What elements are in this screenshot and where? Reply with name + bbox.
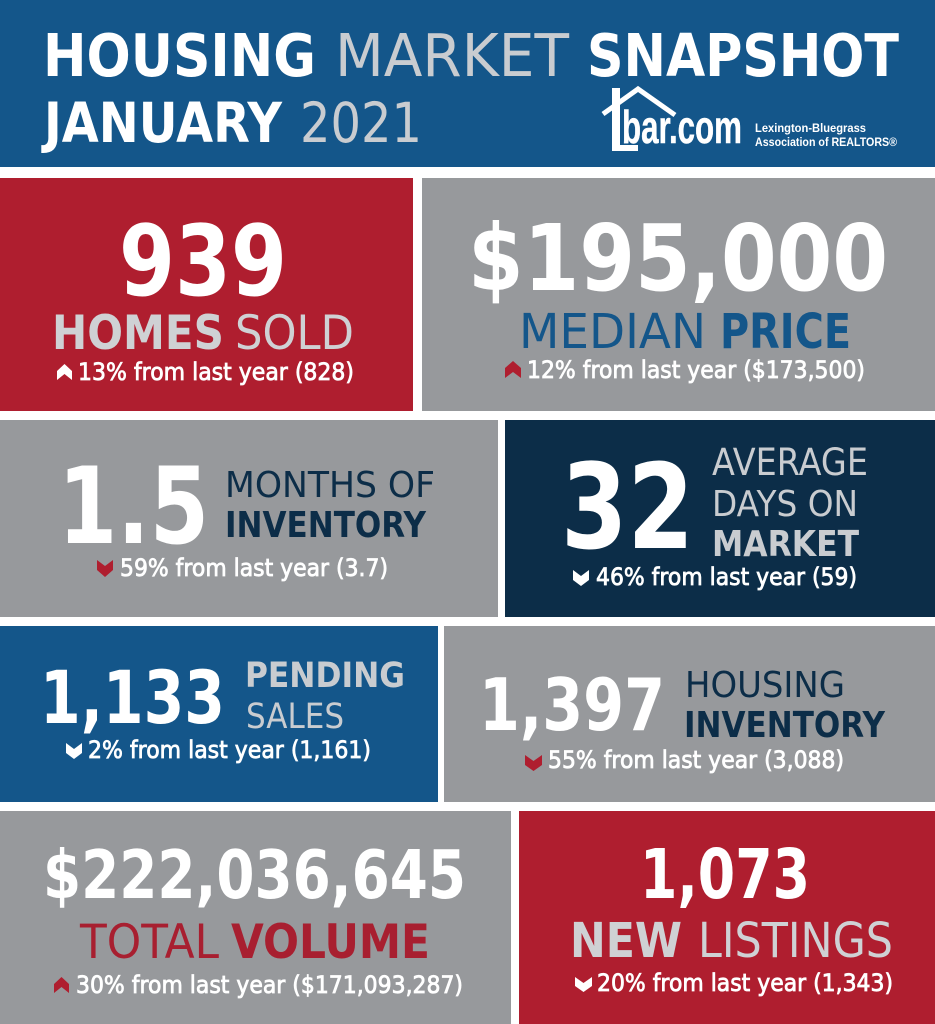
panel: new listings: 1,073 — [640, 835, 810, 915]
subtitle: january 2021: JANUARY — [41, 91, 283, 155]
panel: average days on market: AVERAGE — [712, 441, 868, 484]
title: housing market snapshot: MARKET — [335, 21, 570, 90]
logo: lbar.com house: Lexington-Bluegrass — [755, 121, 866, 135]
panel: new listings: NEW — [570, 913, 682, 969]
logo: lbar.com house — [603, 88, 897, 153]
panel: header — [0, 0, 935, 167]
panel: median price: MEDIAN — [519, 304, 706, 360]
panel: average days on market: 32 — [561, 438, 694, 576]
panel: pending sales: 1,133 — [40, 656, 225, 741]
panel: housing inventory: 1,397 — [479, 663, 665, 747]
panel: total volume: VOLUME — [231, 915, 430, 970]
icon: down arrow — [66, 743, 82, 759]
panel: average days on market: 46% from last year (59) — [596, 563, 857, 591]
icon: up arrow — [54, 977, 69, 993]
panel: homes sold: HOMES — [52, 306, 224, 361]
panel: median price: 12% from last year ($173,500) — [527, 356, 865, 384]
panel: new listings: LISTINGS — [698, 913, 893, 969]
panel: median price: PRICE — [720, 304, 851, 360]
panel: homes sold: 13% from last year (828) — [78, 358, 354, 386]
panel: pending sales: 2% from last year (1,161) — [88, 736, 371, 764]
panel: housing inventory: HOUSING — [685, 665, 845, 706]
panel: months of inventory: 59% from last year (3.7) — [120, 554, 388, 582]
panel: average days on market — [505, 420, 935, 617]
panel: housing inventory — [444, 626, 935, 802]
icon: up arrow — [505, 361, 521, 378]
panel: homes sold: SOLD — [235, 306, 354, 361]
panel: housing inventory: INVENTORY — [684, 705, 886, 746]
icon: down arrow — [575, 977, 592, 992]
logo: lbar.com house: bar.com — [622, 101, 742, 153]
panel: median price — [422, 178, 935, 411]
title: housing market snapshot — [43, 21, 899, 90]
panel: housing inventory: 55% from last year (3,088) — [548, 746, 844, 774]
subtitle: january 2021: 2021 — [300, 91, 422, 155]
panel: total volume — [0, 811, 511, 1024]
icon: up arrow — [57, 364, 72, 380]
panel: months of inventory: 1.5 — [58, 445, 209, 568]
logo: lbar.com house: Association of REALTORS® — [755, 135, 897, 149]
panel: new listings — [519, 811, 935, 1024]
icon: down arrow — [573, 570, 589, 586]
panel: homes sold: 939 — [119, 205, 287, 319]
panel: pending sales: PENDING — [245, 656, 405, 696]
panel: months of inventory: MONTHS OF — [225, 465, 435, 506]
panel: average days on market: DAYS ON — [712, 484, 858, 525]
panel: homes sold — [0, 178, 413, 411]
panel: total volume: TOTAL — [79, 915, 219, 970]
icon: down arrow — [97, 560, 113, 577]
panel: months of inventory — [0, 420, 498, 617]
panel: pending sales — [0, 626, 438, 802]
panel: average days on market: MARKET — [712, 524, 859, 565]
panel: months of inventory: INVENTORY — [225, 505, 427, 546]
panel: new listings: 20% from last year (1,343) — [597, 969, 893, 997]
panel: pending sales: SALES — [246, 697, 344, 737]
icon: down arrow — [525, 755, 542, 771]
title: housing market snapshot: HOUSING — [43, 21, 316, 90]
panel: total volume: $222,036,645 — [43, 836, 466, 914]
panel: total volume: 30% from last year ($171,093,287) — [76, 971, 463, 999]
